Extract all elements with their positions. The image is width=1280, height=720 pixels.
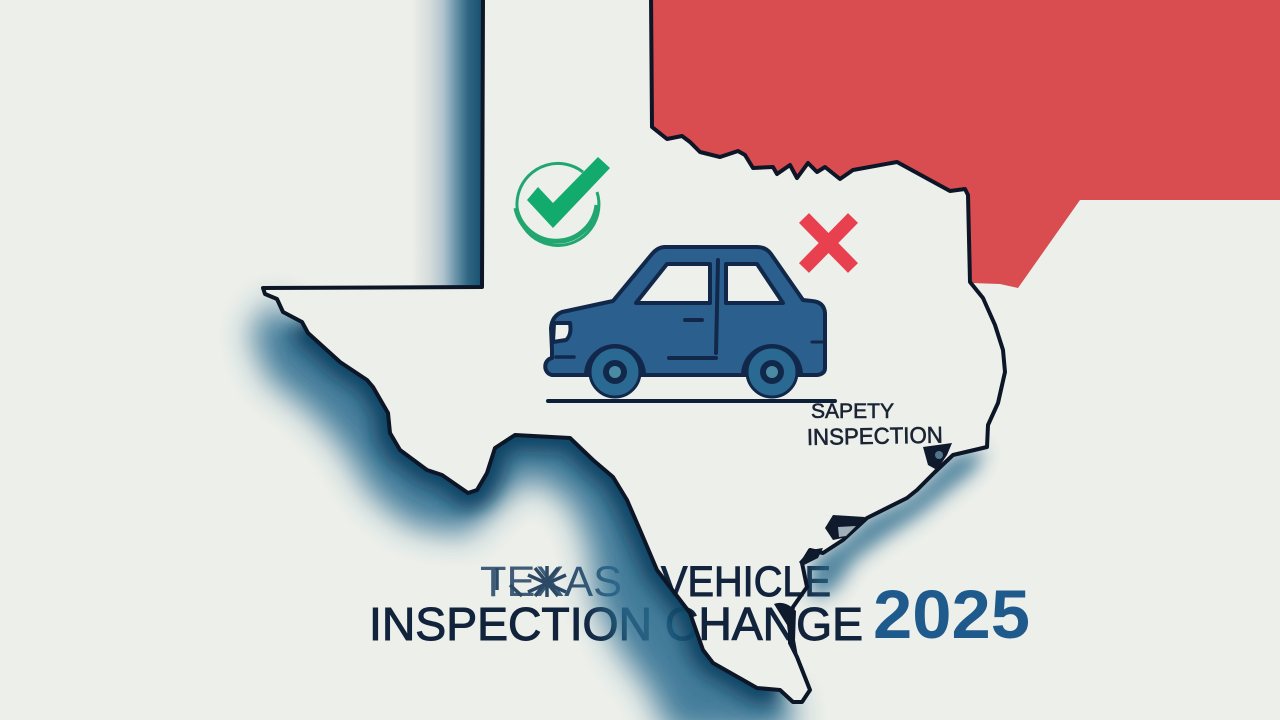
door pillar: [716, 260, 718, 353]
check ring: [517, 163, 599, 245]
front hub: [603, 360, 627, 384]
front hub centre: [609, 366, 621, 378]
rear hub centre: [766, 366, 778, 378]
Matagorda speckle: [838, 526, 856, 537]
tail light: [812, 340, 825, 344]
shadow: gulf coast: [810, 449, 985, 600]
title line one: Texas: TEXAS: [480, 558, 622, 606]
rear window: [726, 264, 783, 303]
icon: red cross: [804, 218, 853, 268]
garbled lettering smudge: [497, 566, 566, 597]
car body: [545, 247, 825, 375]
bumper trim: [556, 355, 574, 359]
icon: green check mark: [516, 157, 610, 245]
coastal islands and bays: [774, 443, 952, 662]
rear wheel: [741, 344, 803, 397]
rear tyre: [747, 347, 797, 397]
map shadow: [250, 0, 985, 720]
check ring thick lower arc: [516, 205, 597, 241]
bay near Matagorda: [825, 515, 865, 540]
Padre Island lagoon: [774, 603, 799, 662]
title line one: Vehicle: VEHICLE: [661, 558, 831, 606]
front wheel arch: [584, 344, 646, 375]
bay near Galveston: [923, 443, 952, 470]
shadow: southwest border core: [302, 322, 780, 690]
front tyre: [590, 347, 640, 397]
door handle: [685, 318, 702, 322]
shadow: panhandle west edge: [418, 0, 481, 286]
label line two: INSPECTION: [807, 422, 943, 450]
headlight: [553, 323, 570, 342]
rear wheel arch: [741, 344, 803, 375]
front wheel: [584, 344, 646, 397]
ground line: [548, 399, 835, 403]
rear hub: [760, 360, 784, 384]
Texas outline: [263, 0, 1005, 702]
title year: 2025: [873, 576, 1030, 653]
label line one: SAPETY: [811, 400, 894, 423]
front window: [636, 264, 710, 303]
bay near Corpus Christi: [799, 548, 823, 566]
check tick: [527, 157, 610, 228]
red neighbouring region: [651, 0, 1280, 288]
door sill: [669, 356, 716, 360]
Galveston speckle: [935, 451, 943, 459]
safety inspection label: [807, 400, 943, 450]
shadow: southwest border wide: [250, 299, 793, 720]
title line two: INSPECTION CHANGE: [369, 598, 863, 650]
car illustration: [545, 247, 835, 401]
title: [369, 558, 1030, 653]
